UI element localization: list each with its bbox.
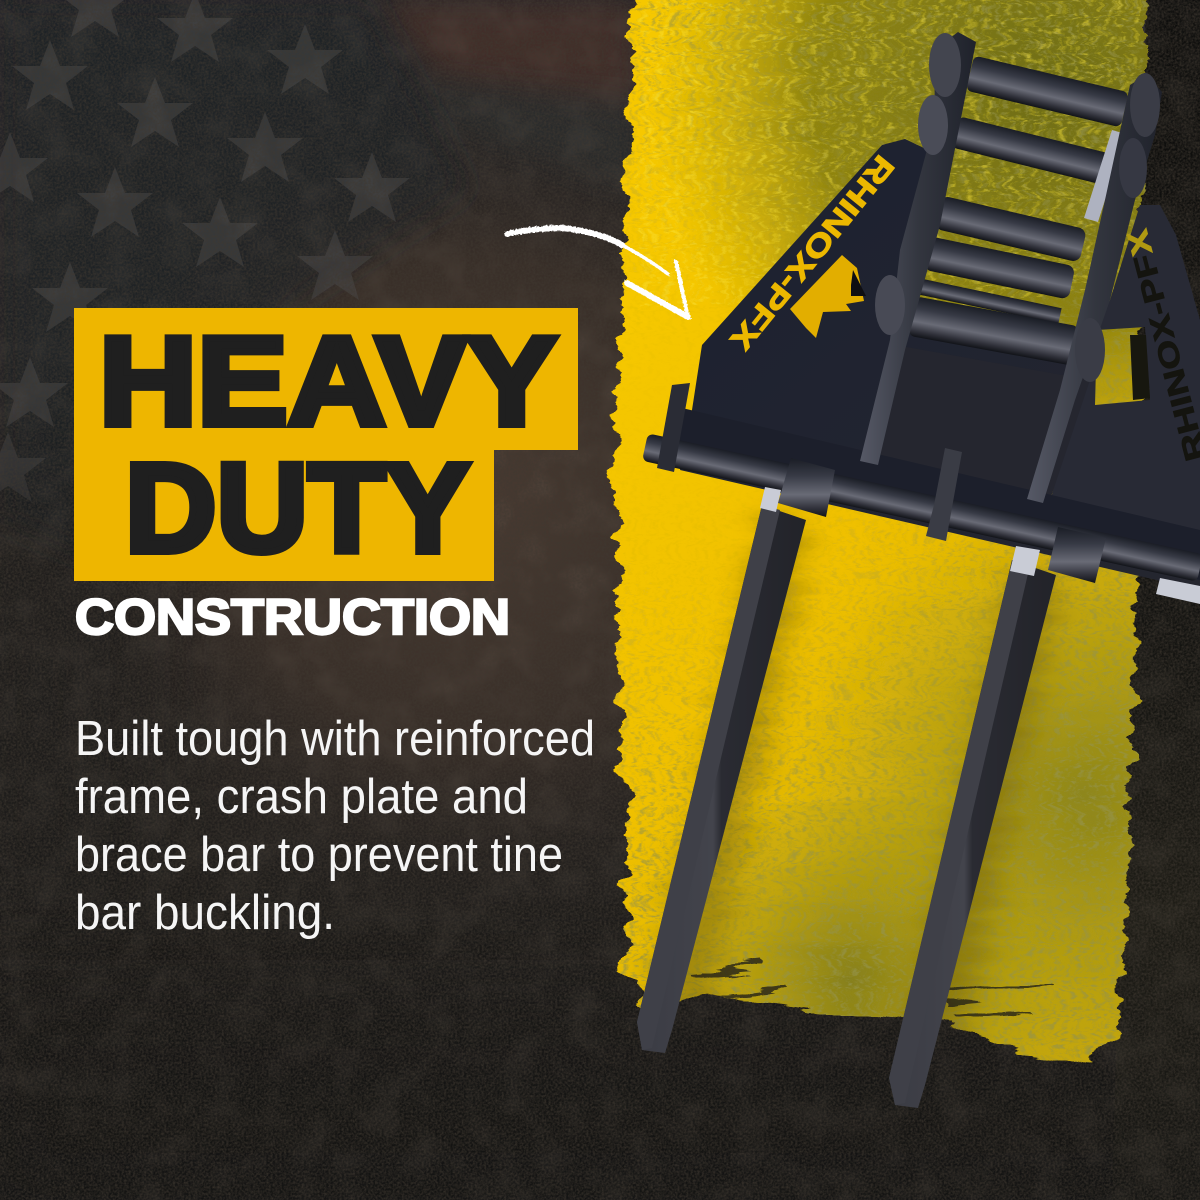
left plate lettering: RHINOX-PFX (724, 149, 900, 356)
body text: frame, crash plate and (75, 770, 528, 824)
flag: stars (0, 0, 410, 502)
light edge of right strap (1084, 130, 1126, 222)
clamp and light bracket pieces (760, 448, 1200, 604)
lower rail band (676, 408, 1200, 580)
product: pallet fork attachment (637, 32, 1200, 1108)
bottom cross tube (642, 433, 1200, 582)
body text: Built tough with reinforced (75, 712, 595, 766)
right gusset plate with cut-out (1040, 205, 1200, 580)
tine shadows on paint (650, 520, 810, 1040)
yellow distressed paint panel (606, 0, 1150, 1062)
left vertical strap (860, 32, 976, 465)
mounting pins (908, 55, 1129, 366)
body text: bar buckling. (75, 886, 335, 940)
body text (75, 712, 595, 940)
flag: dim red stripe area (372, 0, 640, 110)
lower dark vignette (0, 960, 1200, 1200)
left tine (637, 505, 806, 1053)
main left gusset and back plate (680, 139, 1200, 590)
subheading: CONSTRUCTION: CONSTRUCTION (75, 589, 510, 645)
rhino logo cut-out (790, 255, 866, 338)
right vertical strap (1027, 73, 1162, 503)
hand-drawn white arrow (507, 228, 688, 317)
right tine (889, 560, 1056, 1108)
bottom edge dark streaks (690, 966, 1060, 1015)
headline: HEAVY: HEAVY (99, 310, 557, 452)
left end bracket (657, 383, 690, 472)
body text: brace bar to prevent tine (75, 828, 563, 882)
headline: DUTY: DUTY (125, 438, 470, 578)
flag: dark canton (0, 0, 470, 560)
